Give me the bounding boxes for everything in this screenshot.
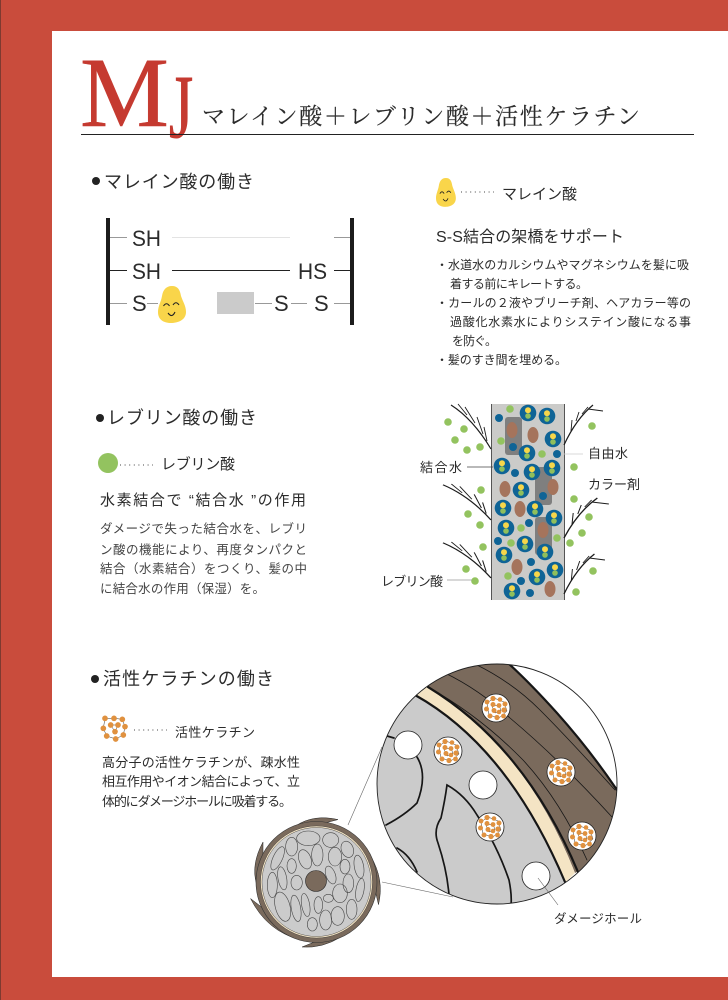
text block: S-S bond support: ・髪のすき間を埋める。 bbox=[436, 353, 567, 367]
label: damage hole: ダメージホール bbox=[554, 911, 642, 926]
text block: active keratin bbox=[102, 755, 300, 809]
strand labels: レブリン酸 bbox=[381, 574, 443, 589]
diagram: S-S bonds: SH bbox=[132, 226, 161, 251]
diagram: S-S bonds: S bbox=[132, 291, 147, 316]
strand labels: 自由水 bbox=[588, 446, 628, 461]
text block: S-S bond support: ・カールの２液やブリーチ剤、ヘアカラー等の bbox=[436, 295, 691, 310]
title: MJ logo: M bbox=[80, 37, 169, 148]
damage holes bbox=[394, 731, 550, 890]
heading: active keratin: 活性ケラチンの働き bbox=[103, 669, 274, 689]
zoom connector lines bbox=[348, 747, 453, 897]
legend: active keratin bbox=[100, 715, 255, 742]
text block: S-S bond support: S-S結合の架橋をサポート bbox=[436, 228, 624, 246]
text block: active keratin: 高分子の活性ケラチンが、疎水性 bbox=[102, 755, 300, 770]
legend: active keratin: 活性ケラチン bbox=[175, 725, 255, 740]
cuticle band bbox=[428, 664, 616, 873]
strand labels: カラー剤 bbox=[588, 477, 640, 492]
strand labels: 結合水 bbox=[420, 460, 462, 475]
diagram: S-S bonds: HS bbox=[298, 259, 327, 284]
text block: S-S bond support: ・水道水のカルシウムやマグネシウムを髪に吸 bbox=[436, 258, 689, 272]
cortex bbox=[378, 696, 564, 904]
diagram: S-S bonds bbox=[106, 218, 354, 325]
icon: maleic acid drop bbox=[158, 286, 186, 323]
text block: bound water: に結合水の作用（保湿）を。 bbox=[100, 581, 265, 596]
cuticle flaps bbox=[250, 818, 380, 947]
heading: levulinic acid: レブリン酸の働き bbox=[107, 407, 257, 428]
label: damage hole bbox=[538, 878, 642, 926]
keratin particles bbox=[434, 694, 596, 850]
legend: maleic acid: マレイン酸 bbox=[502, 186, 577, 203]
text block: bound water bbox=[100, 492, 307, 596]
legend: maleic acid bbox=[436, 178, 577, 207]
diagram: S-S bonds: S bbox=[274, 291, 289, 316]
legend: levulinic acid: レブリン酸 bbox=[161, 455, 235, 473]
text block: active keratin: 体的にダメージホールに吸着する。 bbox=[102, 794, 292, 809]
text block: bound water: 結合（水素結合）をつくり、髪の中 bbox=[100, 561, 307, 576]
text block: bound water: ダメージで失った結合水を、レブリ bbox=[100, 521, 307, 536]
text block: active keratin: 相互作用やイオン結合によって、立 bbox=[102, 774, 300, 789]
text block: bound water: ン酸の機能により、再度タンパクと bbox=[100, 542, 307, 557]
brown colorant bbox=[500, 422, 558, 597]
title: MJ logo: J bbox=[169, 57, 193, 157]
magnified hair circle bbox=[376, 664, 618, 904]
text block: S-S bond support: 過酸化水素水によりシステイン酸になる事 bbox=[450, 315, 691, 329]
cream layer bbox=[417, 687, 575, 882]
levulinic acid dots bbox=[444, 405, 597, 596]
free water bbox=[494, 414, 561, 597]
strand labels bbox=[381, 446, 640, 589]
hair cross-section bbox=[250, 818, 380, 947]
diagram: S-S bonds: S bbox=[314, 291, 329, 316]
chart: hair strand with levulinic acid bbox=[381, 404, 640, 600]
text block: bound water: 水素結合で “結合水 ”の作用 bbox=[100, 492, 306, 509]
text block: S-S bond support bbox=[436, 228, 691, 367]
text block: S-S bond support: 着する前にキレートする。 bbox=[450, 276, 588, 291]
legend: levulinic acid bbox=[98, 453, 235, 473]
title: ingredients: マレイン酸＋レブリン酸＋活性ケラチン bbox=[202, 104, 640, 129]
heading: maleic acid: マレイン酸の働き bbox=[104, 172, 254, 192]
cuticle scales bbox=[443, 404, 609, 594]
bound water molecules bbox=[494, 405, 563, 599]
strand body bbox=[491, 404, 565, 600]
diagram: S-S bonds: SH bbox=[132, 259, 161, 284]
text block: S-S bond support: を防ぐ。 bbox=[452, 333, 497, 348]
